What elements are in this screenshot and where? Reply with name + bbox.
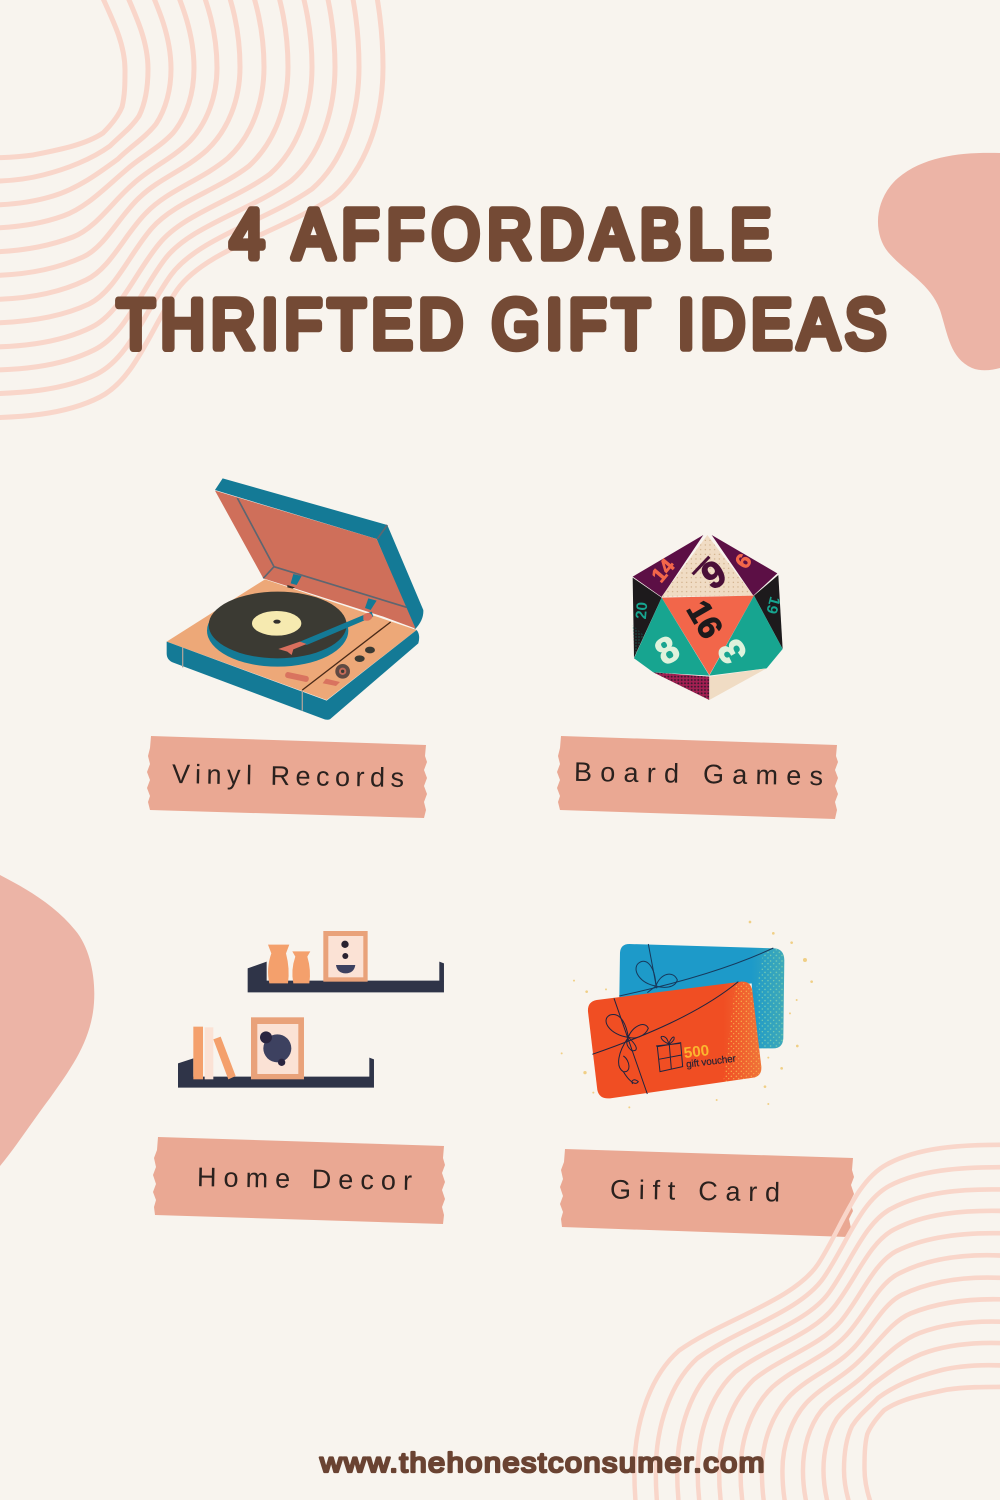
- wave lines: bottom right: [634, 1145, 1000, 1500]
- icon: twenty-sided die: 9: [730, 549, 756, 573]
- icon: gift cards: [561, 921, 813, 1108]
- blob: left: [0, 875, 94, 1166]
- label: Gift Card: Gift Card: [610, 1175, 780, 1207]
- icon: wall shelves: [178, 931, 444, 1088]
- label: Board Games: [557, 736, 838, 819]
- label: Home Decor: Home Decor: [197, 1162, 412, 1196]
- label: Vinyl Records: Vinyl Records: [172, 759, 404, 793]
- icon: twenty-sided die: 6: [694, 551, 733, 598]
- label: Vinyl Records: [147, 736, 427, 818]
- icon: twenty-sided die: 16: [679, 594, 729, 645]
- label: Gift Card: [560, 1149, 854, 1237]
- title: 4 AFFORDABLE: [230, 194, 771, 273]
- icon: twenty-sided die: 14: [647, 554, 680, 587]
- icon: twenty-sided die: 8: [648, 627, 686, 673]
- icon: twenty-sided die: [633, 535, 783, 700]
- title: [117, 194, 886, 363]
- label: Board Games: Board Games: [574, 757, 823, 791]
- icon: twenty-sided die: 3: [709, 632, 755, 671]
- icon: twenty-sided die: 20: [633, 601, 651, 620]
- label: Home Decor: [153, 1137, 445, 1224]
- blob: top right: [878, 153, 1000, 370]
- icon: record player: [167, 478, 423, 720]
- icon: gift cards: 500: [683, 1042, 710, 1062]
- website url: www.thehonestconsumer.com: [319, 1447, 764, 1479]
- icon: gift cards: gift voucher: [686, 1053, 737, 1071]
- icon: twenty-sided die: 19: [762, 595, 783, 616]
- wave lines: top left: [0, 0, 383, 418]
- title: THRIFTED GIFT IDEAS: [117, 284, 886, 363]
